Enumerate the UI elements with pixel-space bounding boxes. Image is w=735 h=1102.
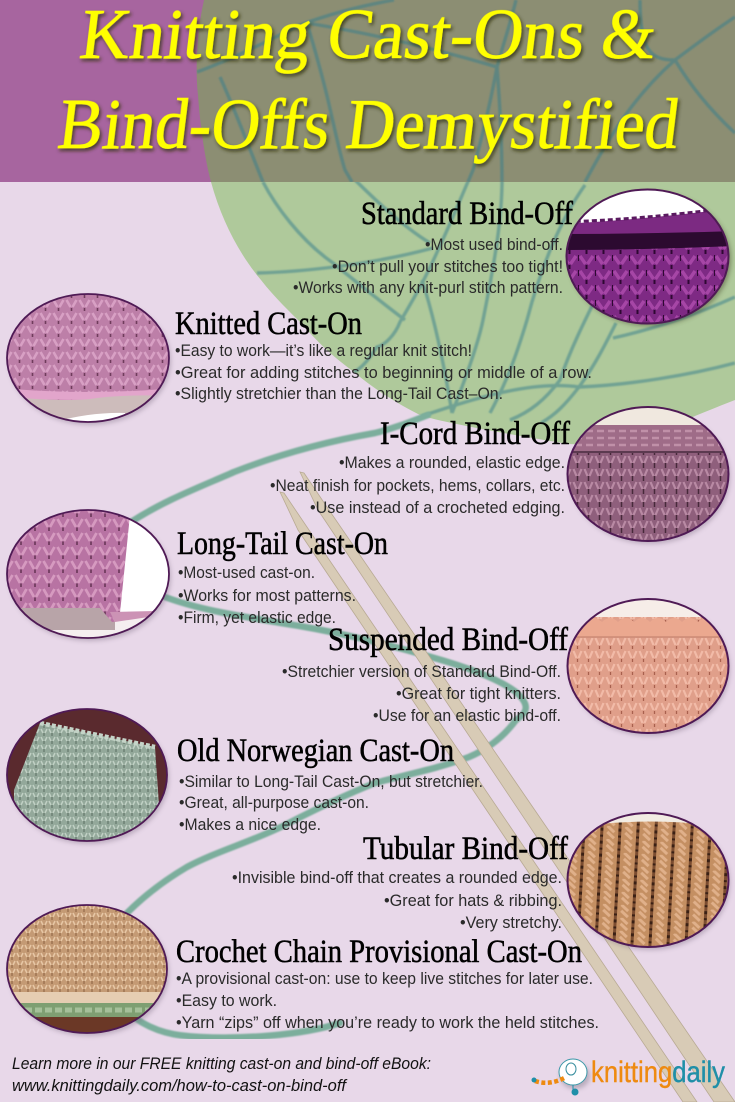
text: Crochet Chain Provisional Cast-On [176,934,599,1032]
text: Old Norwegian Cast-On: Old Norwegian Cast-On [177,733,454,769]
yarn strands [127,415,526,1038]
title [54,0,684,164]
text: Tubular Bind-Off: •Very stretchy. [460,914,562,932]
text: Old Norwegian Cast-On: •Great, all-purpose cast-on. [179,794,369,812]
text: Knitted Cast-On: •Slightly stretchier than the Long-Tail Cast–On. [175,385,503,403]
photo: Standard Bind-Off [560,185,735,330]
text: Crochet Chain Provisional Cast-On: •Easy to work. [176,992,277,1010]
strand: bottom [135,1018,340,1038]
strand: long S-curve [127,597,526,913]
text: Suspended Bind-Off: •Great for tight knitters. [396,685,561,703]
logo icon: sheep with scarf [532,1059,590,1096]
text: Knitted Cast-On [175,306,592,403]
text: Standard Bind-Off: •Most used bind-off. [425,236,563,254]
photo: Suspended Bind-Off [560,595,735,740]
text: Suspended Bind-Off: Suspended Bind-Off [328,622,568,658]
text: Suspended Bind-Off [282,622,568,725]
text: Old Norwegian Cast-On: •Makes a nice edge. [179,816,321,834]
text: I-Cord Bind-Off: I-Cord Bind-Off [380,416,570,452]
text: Tubular Bind-Off: Tubular Bind-Off [363,831,568,867]
text: Old Norwegian Cast-On: •Similar to Long-Tail Cast-On, but stretchier. [179,773,483,791]
text: Crochet Chain Provisional Cast-On: Crochet Chain Provisional Cast-On [176,934,582,970]
needle: left [280,492,697,1102]
text: Tubular Bind-Off [232,831,568,932]
needle: right [300,472,735,1102]
text: Suspended Bind-Off: •Stretchier version of Standard Bind-Off. [282,663,561,681]
photo: Long-Tail Cast-On [0,505,175,645]
header band [0,0,735,182]
text: Knitted Cast-On: •Easy to work—it’s like a regular knit stitch! [175,342,472,360]
footer text: www.knittingdaily.com/how-to-cast-on-bind-off [12,1077,348,1095]
text: Standard Bind-Off: •Works with any knit-purl stitch pattern. [293,279,563,297]
text: Long-Tail Cast-On: Long-Tail Cast-On [177,526,388,562]
yarn ball strands [257,170,735,423]
header: purple [0,0,211,182]
text: Standard Bind-Off: •Don’t pull your stitches too tight! [332,258,563,276]
text: Standard Bind-Off [293,196,573,297]
logo wordmark: knittingdaily [591,1056,725,1089]
header: strands [197,0,735,182]
photo: Knitted Cast-On [0,290,175,430]
photo: Tubular Bind-Off [566,812,732,952]
knitting needles [280,472,735,1102]
strand: upper [131,415,428,522]
text: Crochet Chain Provisional Cast-On: •A provisional cast-on: use to keep live stitches for later use. [176,970,593,988]
photo: I-Cord Bind-Off [566,406,732,546]
header: olive over ball [190,0,735,182]
text: Old Norwegian Cast-On [177,733,483,834]
text: I-Cord Bind-Off: •Neat finish for pockets, hems, collars, etc. [270,477,565,495]
text: Long-Tail Cast-On: •Firm, yet elastic edge. [178,609,336,627]
photo: Crochet Chain Provisional Cast-On [0,900,175,1040]
text: Crochet Chain Provisional Cast-On: •Yarn “zips” off when you’re ready to work the held stitches. [176,1014,599,1032]
title: Bind-Offs Demystified [54,84,684,164]
text: I-Cord Bind-Off: •Makes a rounded, elastic edge. [339,454,565,472]
footer text: Learn more in our FREE knitting cast-on and bind-off eBook: [12,1055,431,1073]
footer text [12,1055,431,1095]
logo: knittingdaily [532,1056,725,1096]
text: Knitted Cast-On: Knitted Cast-On [175,306,362,342]
text: Standard Bind-Off: Standard Bind-Off [361,196,573,232]
text: Knitted Cast-On: •Great for adding stitches to beginning or middle of a row. [175,364,592,382]
text: Long-Tail Cast-On: •Most-used cast-on. [178,564,315,582]
text: Long-Tail Cast-On: •Works for most patterns. [178,587,356,605]
yarn ball [211,182,735,444]
text: Tubular Bind-Off: •Great for hats & ribbing. [384,892,562,910]
photo: Old Norwegian Cast-On [6,708,171,846]
text: I-Cord Bind-Off [270,416,570,517]
text: Tubular Bind-Off: •Invisible bind-off that creates a rounded edge. [232,869,562,887]
text: I-Cord Bind-Off: •Use instead of a crocheted edging. [310,499,565,517]
text: Long-Tail Cast-On [177,526,388,627]
text: Suspended Bind-Off: •Use for an elastic bind-off. [373,707,561,725]
